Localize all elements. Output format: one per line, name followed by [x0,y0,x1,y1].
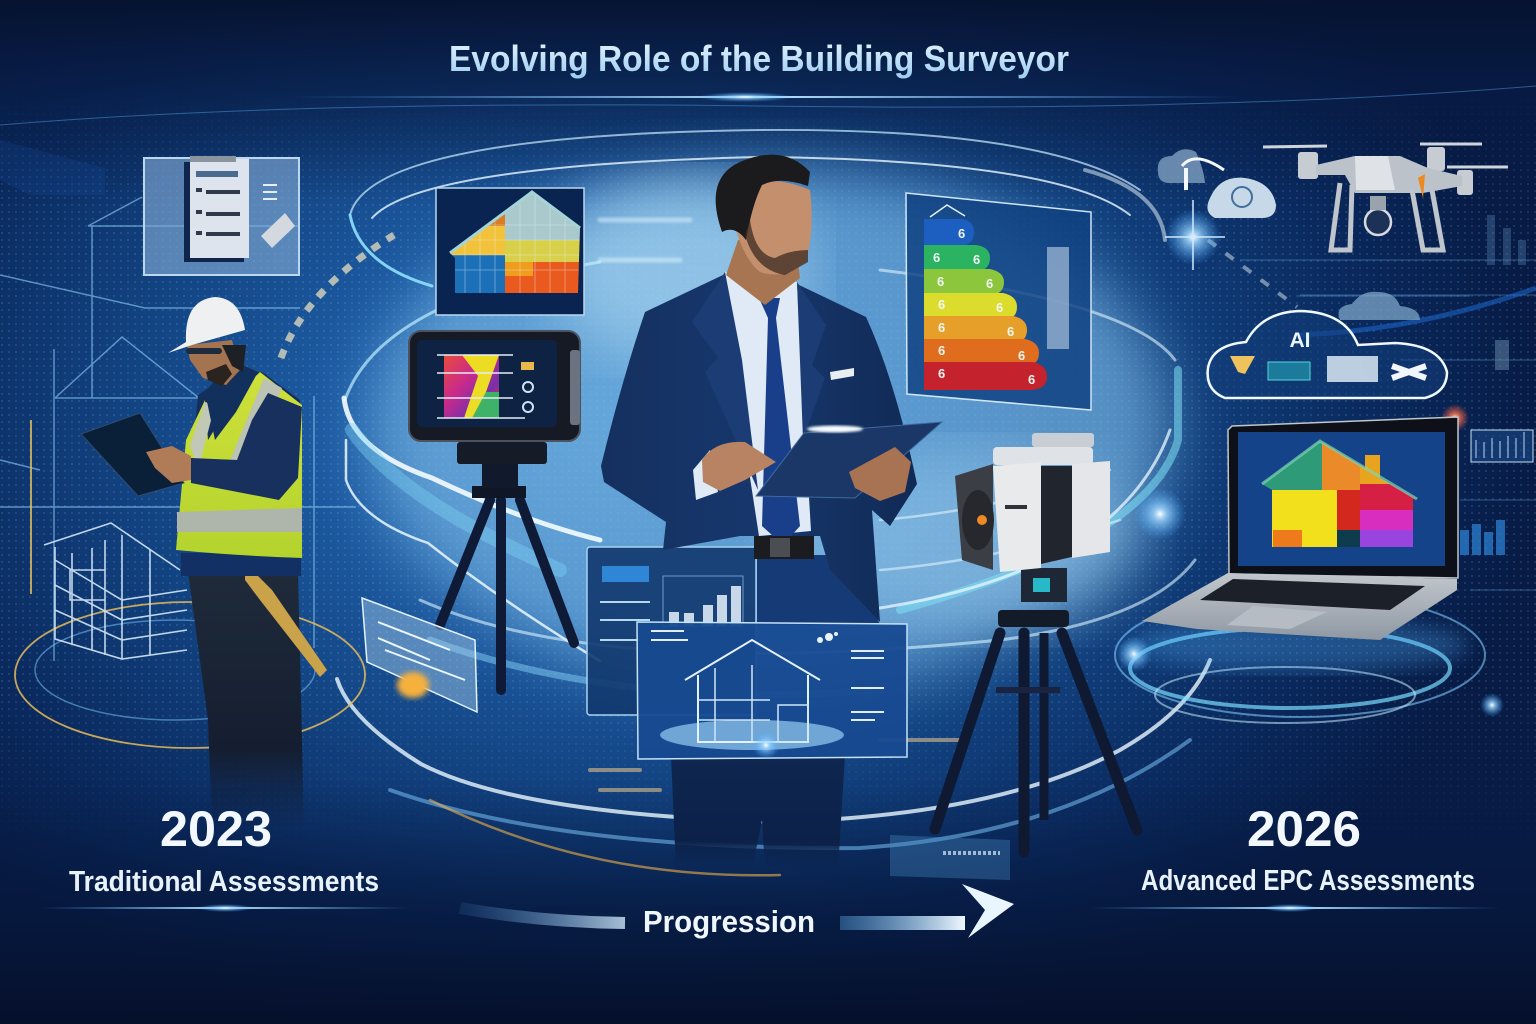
panel: EPC rating chart: 6 [938,297,945,312]
panel: EPC rating chart: 6 [1028,372,1035,387]
tie [759,298,800,545]
panel: thermal camera on tripod [409,331,580,690]
title [290,38,1240,102]
label: 2023: Traditional Assessments [69,866,379,898]
panel: EPC rating chart: 6 [938,366,945,381]
hard hat [168,297,245,353]
tablet [756,422,942,498]
faint panel below tripod [890,835,1010,880]
face [728,181,812,274]
panel: EPC rating chart: 6 [933,250,940,265]
clipboard [81,413,184,496]
businessman with tablet [601,155,942,870]
beard [206,364,232,386]
progression arrow [460,884,1014,939]
panel: EPC rating chart: 6 [1018,348,1025,363]
panel: EPC rating chart [906,193,1091,410]
jacket [601,275,917,622]
label: 2026: 2026 [1247,801,1361,857]
dashed trail left [281,235,394,358]
trousers upper [757,555,880,625]
belt [754,536,814,559]
holographic rings (back) [15,130,1485,875]
panel: dashboard with bar chart [587,547,756,715]
arm [191,393,302,500]
panel: floating form sheet [362,598,477,712]
lapels [692,272,758,490]
face [187,340,240,385]
panel: EPC rating chart: 6 [937,274,944,289]
hand [146,446,191,483]
panel: EPC rating chart: 6 [938,320,945,335]
worker with clipboard [81,297,327,826]
icon: AI cloud [1208,311,1447,398]
label: 2026: Advanced EPC Assessments [1141,865,1475,897]
pocket square [830,368,854,380]
panel: EPC rating chart: 6 [996,300,1003,315]
label: 2023: 2023 [160,801,272,857]
collar [205,360,258,440]
title: Evolving Role of the Building Surveyor [449,38,1069,79]
neck [726,240,800,305]
hair [222,345,246,372]
laser scanner on tripod [935,433,1137,852]
cuff left [693,450,718,500]
right side bar charts [1460,215,1533,555]
glow nodes [1116,200,1504,717]
dashed trail right [1208,240,1297,307]
laptop with thermal house [1130,417,1470,671]
clouds icons [1158,149,1276,218]
progression arrow: Progression [643,904,815,939]
trousers lower [671,755,845,870]
safety glasses [186,348,222,354]
jacket hem [181,553,301,576]
icon: AI cloud: AI [1290,329,1310,352]
beard [745,220,808,275]
panel: holographic house plan [637,622,907,759]
shirt [725,272,811,536]
hair [716,155,810,240]
drone [1263,144,1508,250]
panel: EPC rating chart: 6 [958,226,965,241]
panel: EPC rating chart: 6 [973,252,980,267]
panel: EPC rating chart: 6 [1007,324,1014,339]
panel: EPC rating chart: 6 [938,343,945,358]
hi-vis vest [176,372,302,558]
hammer [245,563,327,677]
panel: EPC rating chart: 6 [986,276,993,291]
panel: thermal house [436,188,585,315]
hands [702,442,776,491]
label: 2023 [40,801,410,912]
wireframe house left [44,523,187,659]
panel: inspection clipboard [144,156,299,275]
icon: small cloud [1338,292,1420,320]
torso [190,372,302,480]
trousers [188,572,304,826]
label: 2026 [1090,801,1500,912]
